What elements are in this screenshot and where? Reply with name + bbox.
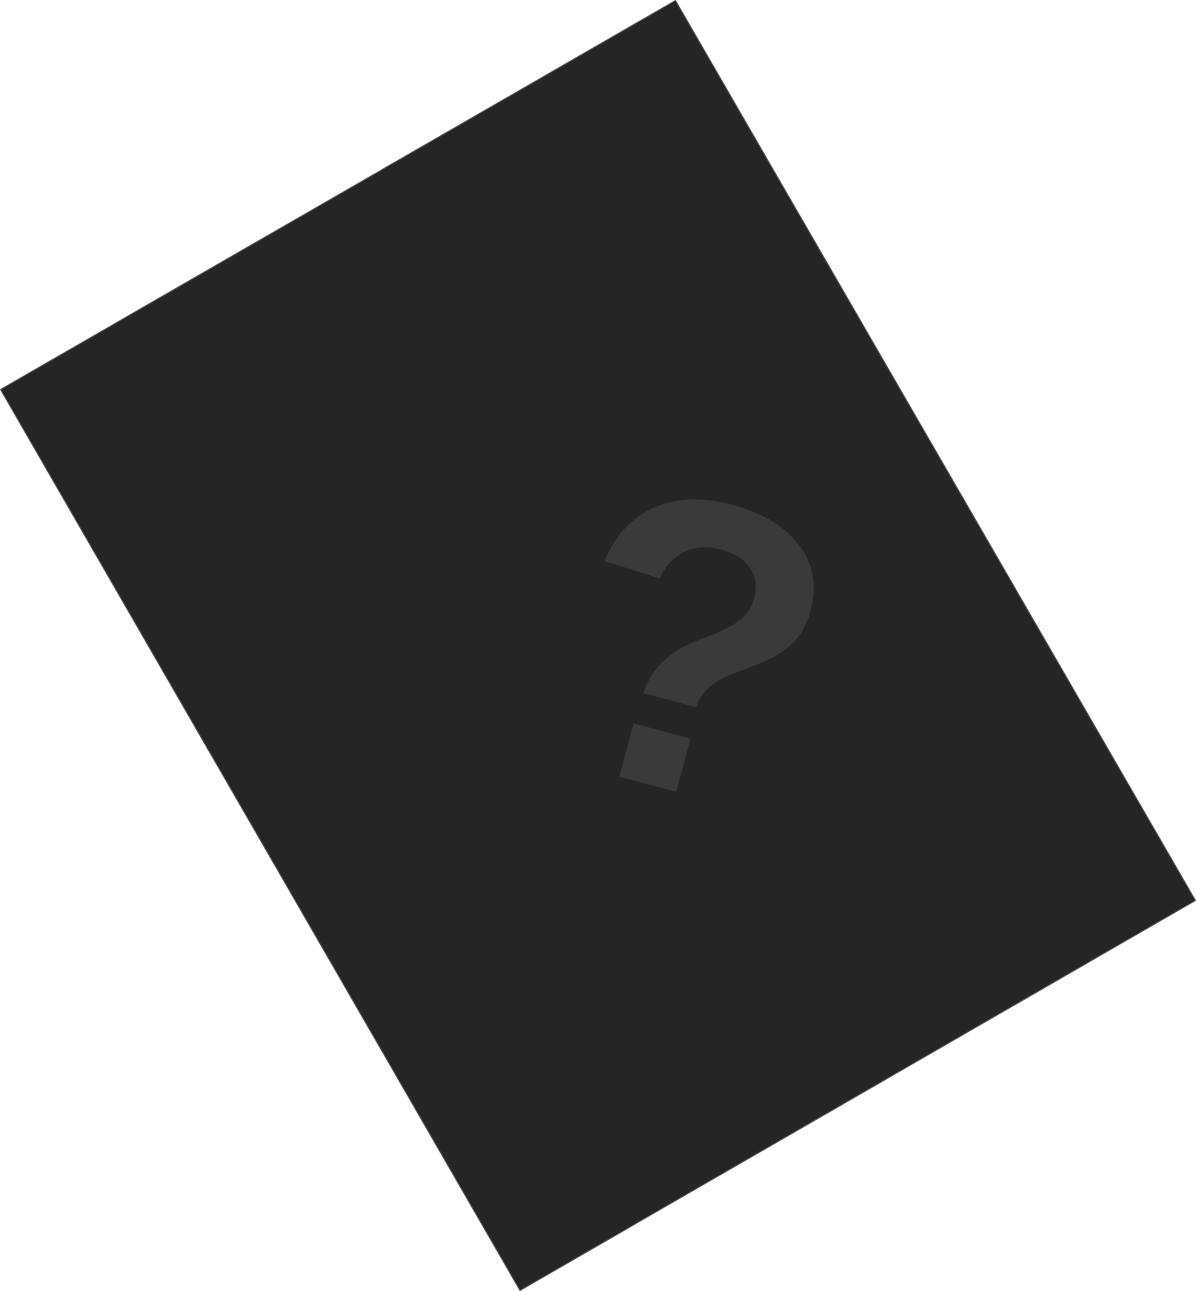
icon: question mark: ? [510,388,877,906]
